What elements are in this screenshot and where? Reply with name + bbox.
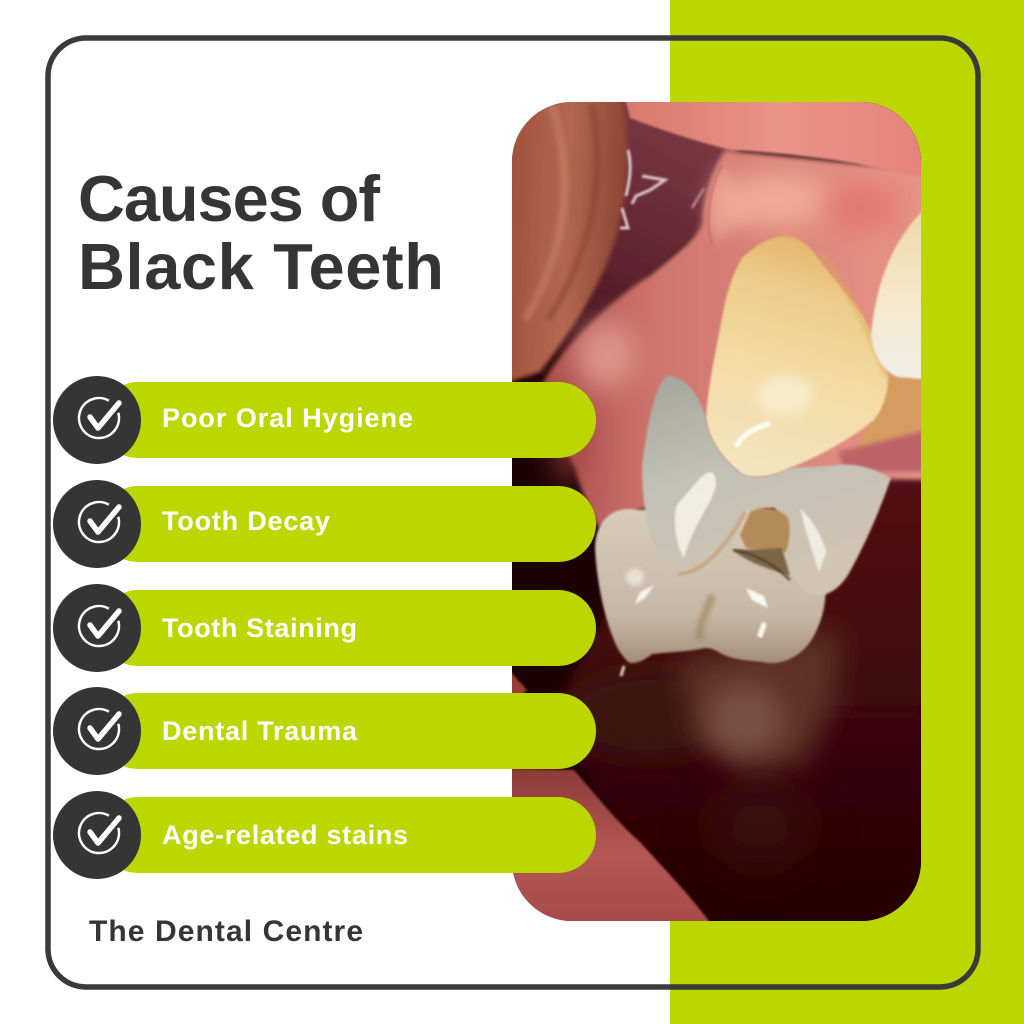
list item: Age-related stains: Age-related stains	[162, 820, 408, 850]
brand name: The Dental Centre	[89, 915, 363, 948]
title: Causes of	[78, 162, 380, 235]
list item: Tooth Staining: Tooth Staining	[162, 613, 357, 643]
list item: Dental Trauma	[53, 687, 596, 775]
list item: Tooth Decay: Tooth Decay	[162, 506, 330, 536]
list item: Poor Oral Hygiene	[53, 376, 596, 464]
list item: Tooth Decay	[53, 480, 596, 568]
green side panel	[670, 0, 1024, 1024]
photo: close-up of discoloured teeth	[512, 102, 921, 921]
list item: Tooth Staining	[53, 584, 596, 672]
title	[78, 162, 444, 303]
list item: Poor Oral Hygiene: Poor Oral Hygiene	[162, 403, 413, 433]
list item: Age-related stains	[53, 791, 596, 879]
list item: Dental Trauma: Dental Trauma	[162, 716, 358, 746]
title: Black Teeth	[78, 230, 444, 303]
